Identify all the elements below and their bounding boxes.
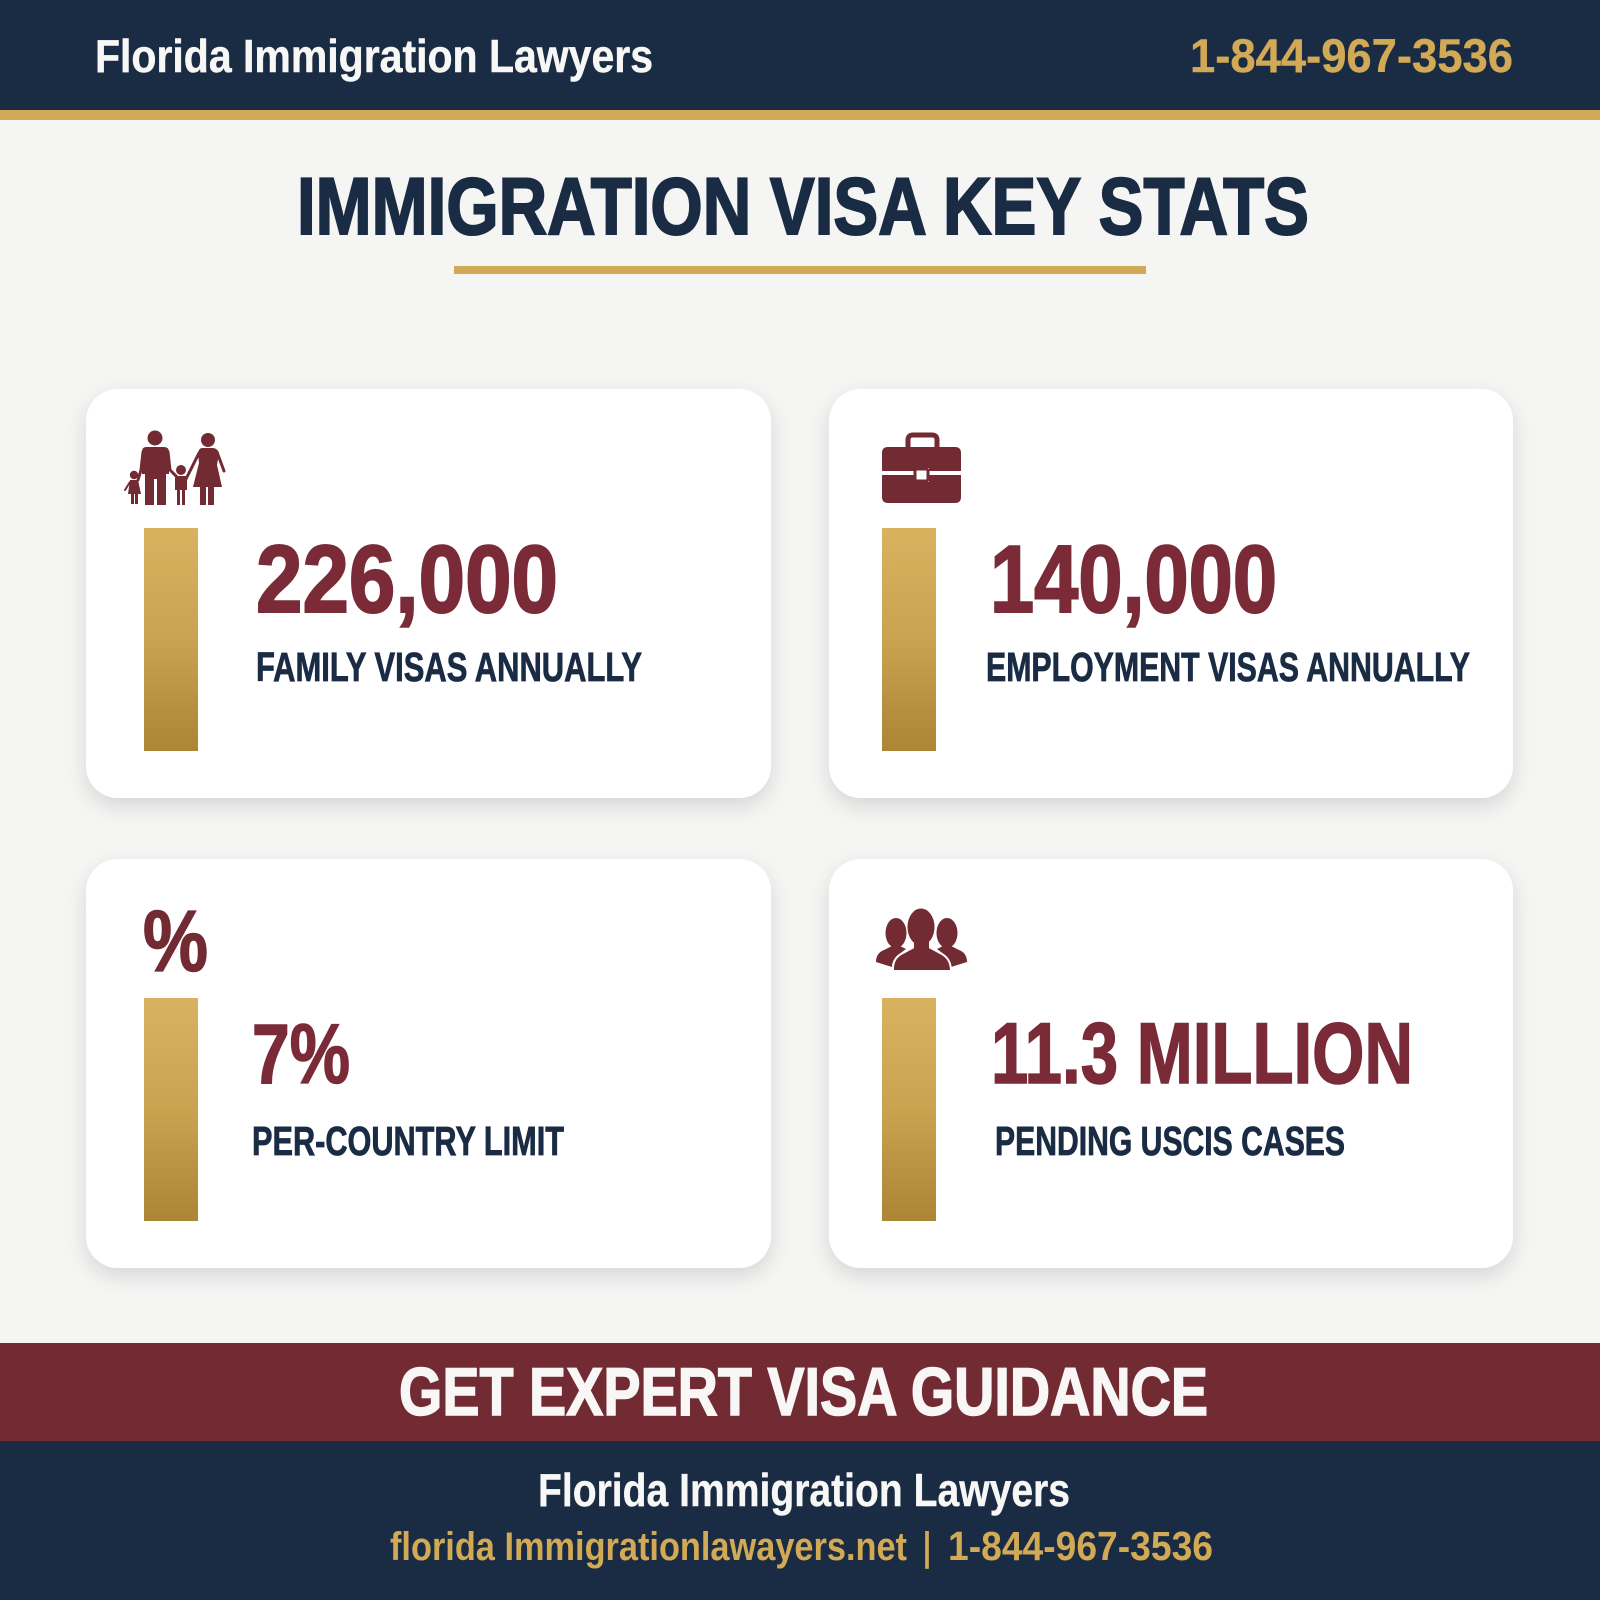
icon: percent: %: [143, 894, 208, 990]
call to action banner: [0, 1343, 1600, 1441]
footer firm name: Florida Immigration Lawyers: [538, 1464, 1070, 1516]
icon: group of people: [876, 908, 967, 971]
header firm name: Florida Immigration Lawyers: [95, 30, 653, 82]
header phone number: 1-844-967-3536: [1190, 29, 1513, 82]
gold bar: [882, 528, 936, 751]
stat label: FAMILY VISAS ANNUALLY: [256, 644, 642, 690]
panel: employment visas: [829, 389, 1513, 798]
footer website: florida Immigrationlawayers.net: [390, 1525, 907, 1569]
footer separator: |: [923, 1525, 931, 1569]
gold bar: [882, 998, 936, 1221]
header bar: [0, 0, 1600, 120]
panel: pending cases: [829, 859, 1513, 1268]
gold bar: [144, 528, 198, 751]
stat label: PENDING USCIS CASES: [995, 1118, 1345, 1164]
footer: [0, 1441, 1600, 1600]
gold bar: [144, 998, 198, 1221]
stat value: 140,000: [990, 526, 1277, 633]
stat value: 7%: [252, 1007, 350, 1101]
footer phone number: 1-844-967-3536: [948, 1523, 1213, 1569]
icon: briefcase: [882, 435, 961, 503]
panel: family visas: [86, 389, 771, 798]
icon: family: [125, 430, 224, 505]
title underline: [454, 266, 1146, 274]
stat value: 11.3 MILLION: [991, 1006, 1413, 1102]
title: IMMIGRATION VISA KEY STATS: [297, 162, 1309, 252]
call to action text: GET EXPERT VISA GUIDANCE: [399, 1354, 1208, 1430]
stat label: PER-COUNTRY LIMIT: [252, 1118, 564, 1164]
stat value: 226,000: [256, 526, 558, 633]
panel: per-country limit: [86, 859, 771, 1268]
